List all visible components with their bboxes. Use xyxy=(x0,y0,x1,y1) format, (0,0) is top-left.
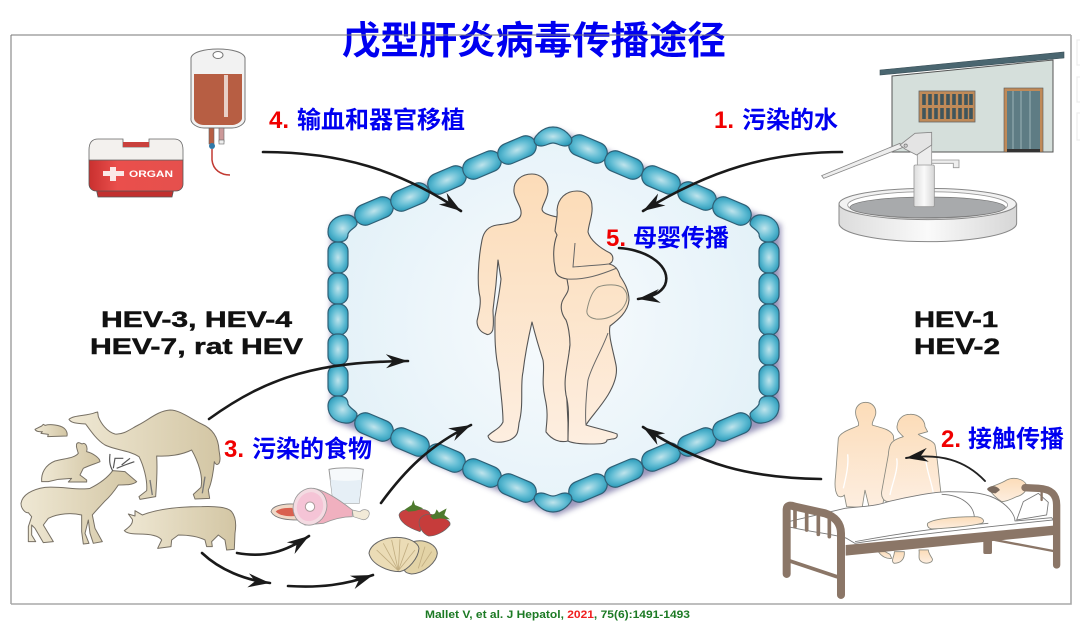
contact scene xyxy=(787,402,1057,595)
label: 3 food: 3. xyxy=(224,436,244,463)
arrow: food into hexagon xyxy=(381,425,471,503)
icon: deer xyxy=(21,454,137,544)
fetus outline xyxy=(587,285,627,319)
icon: rat xyxy=(35,424,67,437)
label: 2 contact: 接触传播 xyxy=(968,426,1064,453)
food group xyxy=(271,468,450,574)
animals group xyxy=(21,410,236,550)
icon: organ box xyxy=(89,139,183,197)
arrow: contact route xyxy=(643,427,821,479)
patient beard xyxy=(987,486,1000,493)
side panel artifacts xyxy=(1077,40,1080,140)
icon: organ box: ORGAN xyxy=(129,169,173,180)
woman silhouette xyxy=(882,414,941,502)
man figure xyxy=(477,174,575,442)
genotypes right: HEV-1 xyxy=(914,307,998,332)
label: 3 food: 污染的食物 xyxy=(252,435,372,463)
icon: ham xyxy=(271,483,369,530)
icon: strawberries xyxy=(399,500,450,536)
pillow xyxy=(1017,493,1048,520)
label: 4 transfusion: 输血和器官移植 xyxy=(297,107,465,134)
genotypes right: HEV-2 xyxy=(914,334,1000,359)
man silhouette xyxy=(835,402,896,508)
genotypes right xyxy=(914,307,1000,359)
label: 1 water: 1. xyxy=(714,107,734,134)
icon: house xyxy=(880,52,1064,152)
label: 4 transfusion: 4. xyxy=(269,107,289,134)
sheet and mattress xyxy=(788,492,1053,543)
patient arm xyxy=(927,517,984,529)
icon: camel xyxy=(69,410,220,499)
arrow: towards shellfish xyxy=(288,575,373,587)
arrow: transfusion route xyxy=(263,152,461,211)
arrow: animals into hexagon xyxy=(209,361,408,419)
icon: pig xyxy=(124,506,236,550)
label: 5 mother to child: 母婴传播 xyxy=(633,225,729,252)
bed frame xyxy=(787,488,1057,595)
genotypes left: HEV-7, rat HEV xyxy=(90,334,303,359)
label: 1 water: 污染的水 xyxy=(742,107,838,134)
genotypes left xyxy=(90,307,303,359)
feet below bed xyxy=(878,550,932,563)
citation: Mallet V, et al. J Hepatol, 2021, 75(6):1491-1493 xyxy=(425,609,690,621)
label: 2 contact: 2. xyxy=(941,426,961,453)
icon: milk glass xyxy=(329,468,363,503)
arrow: pig to ham xyxy=(237,536,309,555)
title: 戊型肝炎病毒传播途径 xyxy=(342,20,726,63)
arrow: pig downward xyxy=(202,553,270,583)
hexagon: liver cell barrier xyxy=(328,127,779,512)
icon: clams xyxy=(369,537,437,574)
arrow: mother to child xyxy=(619,248,666,299)
genotypes left: HEV-3, HEV-4 xyxy=(101,307,293,332)
central figures: man and pregnant woman xyxy=(477,174,629,444)
pregnant woman figure xyxy=(554,191,629,444)
label: 5 mother to child: 5. xyxy=(606,225,626,252)
arrow: contaminated water route xyxy=(643,152,842,211)
patient head xyxy=(988,478,1027,502)
arrow: patient to contact xyxy=(906,456,985,481)
icon: rabbit xyxy=(42,443,100,482)
icon: water pump basin xyxy=(822,132,1017,242)
icon: blood bag xyxy=(191,49,245,175)
